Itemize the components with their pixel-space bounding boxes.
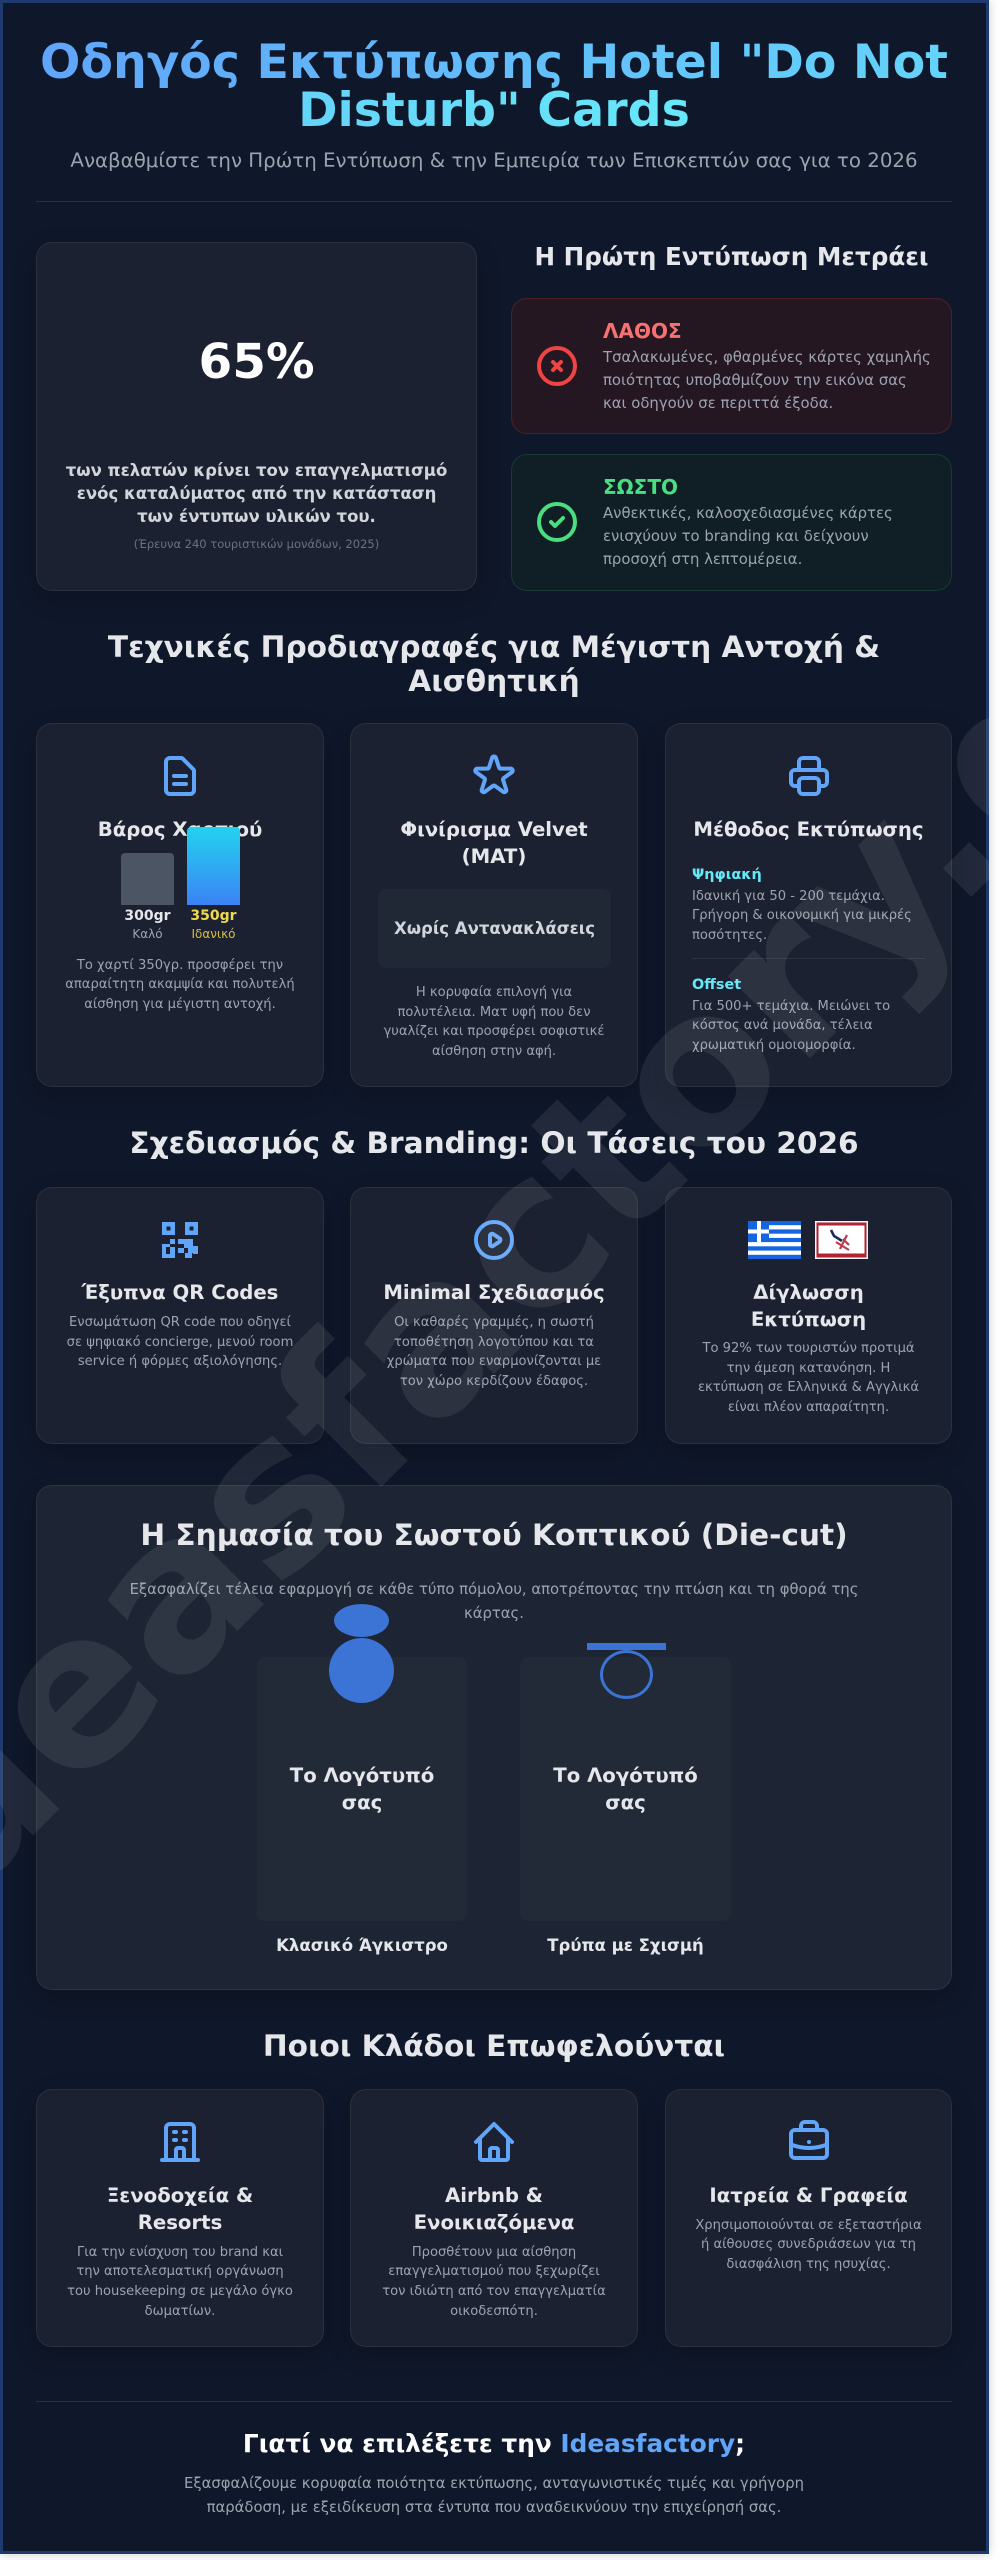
bar label: 300gr: 300gr xyxy=(124,908,171,924)
stat number: 65% xyxy=(198,334,315,390)
card title: Airbnb & xyxy=(445,2184,543,2207)
card title: Μέθοδος Εκτύπωσης xyxy=(693,818,924,841)
card text: Προσθέτουν μια αίσθηση xyxy=(412,2244,576,2260)
heading: first impression: Η Πρώτη Εντύπωση Μετράει xyxy=(534,242,929,271)
panel text: κάρτας. xyxy=(464,1604,524,1622)
bar: 350gr xyxy=(187,827,240,905)
no reflections box xyxy=(378,889,611,968)
card title: Minimal Σχεδιασμός xyxy=(383,1281,605,1304)
heading: sectors: Ποιοι Κλάδοι Επωφελούνται xyxy=(263,2029,725,2063)
title: Οδηγός Εκτύπωσης Hotel "Do Not xyxy=(40,34,948,90)
digital text: ποσότητες. xyxy=(692,928,767,943)
panel: die-cut importance xyxy=(36,1485,952,1990)
card text: Για την ενίσχυση του brand και xyxy=(77,2244,283,2260)
card text xyxy=(695,2218,922,2272)
card text: Χρησιμοποιούνται σε εξεταστήρια xyxy=(695,2218,922,2232)
footer text: Εξασφαλίζουμε κορυφαία ποιότητα εκτύπωσης, ανταγωνιστικές τιμές και γρήγορη xyxy=(184,2475,804,2492)
card text: την άμεση κατανόηση. Η xyxy=(727,1361,890,1376)
icon: flags xyxy=(748,1221,868,1259)
hook label: Κλασικό Άγκιστρο xyxy=(276,1936,448,1955)
digital text xyxy=(692,888,912,943)
logo placeholder text xyxy=(290,1764,434,1814)
panel: bilingual printing xyxy=(665,1187,952,1444)
panel: paper weight xyxy=(36,723,324,1087)
card text: τον χώρο κερδίζουν έδαφος. xyxy=(400,1374,588,1389)
panel: printing method xyxy=(665,723,952,1087)
right text xyxy=(603,504,893,568)
footer text xyxy=(184,2475,804,2516)
card text: σε ψηφιακό concierge, μενού room xyxy=(67,1335,293,1350)
card title: Resorts xyxy=(138,2211,222,2234)
offset text: Για 500+ τεμάχια. Μειώνει το xyxy=(692,998,890,1014)
card title: Ξενοδοχεία & xyxy=(107,2184,253,2207)
bar: 300gr xyxy=(121,853,174,905)
hook shape: circle xyxy=(329,1638,394,1703)
logo placeholder text: Το Λογότυπό xyxy=(553,1764,698,1787)
panel: QR codes xyxy=(36,1187,324,1444)
card title xyxy=(414,2184,574,2234)
card text xyxy=(384,985,604,1059)
card text: Η κορυφαία επιλογή για xyxy=(416,985,572,1000)
icon: star xyxy=(473,754,515,794)
card text: χρώματα που εναρμονίζονται με xyxy=(387,1354,601,1369)
icon: home xyxy=(474,2122,514,2162)
stat description: των έντυπων υλικών του. xyxy=(137,507,376,526)
digital label: Ψηφιακή xyxy=(692,867,762,883)
slit shape xyxy=(587,1643,666,1650)
card text xyxy=(387,1315,601,1389)
stat description xyxy=(66,461,447,526)
logo placeholder text: σας xyxy=(342,1791,382,1814)
panel: hotels xyxy=(36,2089,324,2347)
card text: Το χαρτί 350γρ. προσφέρει την xyxy=(77,958,283,972)
heading: technical specifications: Τεχνικές Προδιαγραφές για Μέγιστη Αντοχή & xyxy=(108,630,880,664)
hole shape xyxy=(600,1650,653,1699)
panel: 65% statistic xyxy=(36,242,477,591)
stat description: των πελατών κρίνει τον επαγγελματισμό xyxy=(66,461,447,480)
wrong label: ΛΑΘΟΣ xyxy=(603,319,682,343)
card text: Το 92% των τουριστών προτιμά xyxy=(702,1341,915,1356)
card title: Βάρος Χαρτιού xyxy=(98,818,262,841)
panel: airbnb xyxy=(350,2089,638,2347)
card title xyxy=(107,2184,253,2234)
card text xyxy=(67,1315,293,1369)
footer divider xyxy=(36,2401,952,2402)
card text xyxy=(382,2244,606,2319)
panel heading: Η Σημασία του Σωστού Κοπτικού (Die-cut) xyxy=(140,1518,848,1552)
icon: briefcase xyxy=(788,2120,830,2160)
icon: QR code xyxy=(162,1222,198,1258)
card text: απαραίτητη ακαμψία και πολυτελή xyxy=(65,977,295,992)
right text: Ανθεκτικές, καλοσχεδιασμένες κάρτες xyxy=(603,504,893,522)
card text: Οι καθαρές γραμμές, η σωστή xyxy=(394,1315,594,1330)
icon: x circle xyxy=(537,346,577,386)
card title: Φινίρισμα Velvet xyxy=(400,818,588,841)
wrong text: Τσαλακωμένες, φθαρμένες κάρτες χαμηλής xyxy=(603,348,931,366)
stat description: ενός καταλύματος από την κατάσταση xyxy=(77,484,436,503)
panel: velvet finish xyxy=(350,723,638,1087)
panel: clinics and offices xyxy=(665,2089,952,2347)
card mock: classic hook xyxy=(257,1657,467,1921)
card text: είναι πλέον απαραίτητη. xyxy=(728,1400,889,1415)
card text: service ή φόρμες αξιολόγησης. xyxy=(78,1354,282,1369)
bar sublabel: ideal: Ιδανικό xyxy=(192,927,235,941)
panel text: Εξασφαλίζει τέλεια εφαρμογή σε κάθε τύπο πόμολου, αποτρέποντας την πτώση και τη φθορά της xyxy=(130,1581,858,1598)
slit label: Τρύπα με Σχισμή xyxy=(547,1936,704,1955)
wrong text xyxy=(602,348,931,412)
header divider xyxy=(36,201,952,202)
card text: αίσθηση στην αφή. xyxy=(432,1044,556,1059)
digital text: Γρήγορη & οικονομική για μικρές xyxy=(692,908,912,923)
card text: εκτύπωση σε Ελληνικά & Αγγλικά xyxy=(698,1380,919,1395)
card text xyxy=(65,958,295,1012)
card text: Ενσωμάτωση QR code που οδηγεί xyxy=(69,1315,291,1330)
offset text: χρωματική ομοιομορφία. xyxy=(692,1038,856,1053)
card title: Ενοικιαζόμενα xyxy=(414,2211,574,2234)
right label: ΣΩΣΤΟ xyxy=(603,475,678,499)
card text: την αποτελεσματική οργάνωση xyxy=(76,2264,284,2279)
card text: επαγγελματισμού που ξεχωρίζει xyxy=(388,2264,600,2279)
card text: διασφάλιση της ησυχίας. xyxy=(726,2257,891,2272)
icon: building xyxy=(160,2122,200,2162)
card title: Έξυπνα QR Codes xyxy=(82,1281,278,1304)
card title xyxy=(751,1281,866,1331)
icon: printer xyxy=(789,756,829,796)
card text: γυαλίζει και προσφέρει σοφιστικέ xyxy=(384,1024,604,1039)
card title xyxy=(400,818,588,868)
panel text xyxy=(130,1581,858,1622)
card mock: hole with slit xyxy=(520,1657,731,1921)
offset label: Offset xyxy=(692,977,741,993)
card text xyxy=(67,2244,293,2319)
card text: ή αίθουσες συνεδριάσεων για τη xyxy=(701,2237,916,2252)
stat source: (Έρευνα 240 τουριστικών μονάδων, 2025) xyxy=(134,537,379,551)
subtitle: Αναβαθμίστε την Πρώτη Εντύπωση & την Εμπειρία των Επισκεπτών σας για το 2026 xyxy=(70,149,918,172)
card title: Εκτύπωση xyxy=(751,1308,866,1331)
right text: ενισχύουν το branding και δείχνουν xyxy=(603,527,869,545)
title: Disturb" Cards xyxy=(298,83,690,138)
card text: του housekeeping σε μεγάλο όγκο xyxy=(67,2284,293,2299)
heading: technical specifications xyxy=(108,630,880,698)
card text: οικοδεσπότη. xyxy=(450,2304,538,2319)
logo placeholder text: σας xyxy=(605,1791,646,1814)
wrong text: ποιότητας υποβαθμίζουν την εικόνα σας xyxy=(603,371,907,389)
card text: τον ιδιώτη από τον επαγγελματία xyxy=(382,2284,606,2299)
wrong text: και οδηγούν σε περιττά έξοδα. xyxy=(603,394,833,412)
card title: Ιατρεία & Γραφεία xyxy=(709,2184,908,2207)
panel: right xyxy=(511,454,952,591)
offset text: κόστος ανά μονάδα, τέλεια xyxy=(692,1018,873,1033)
box text: Χωρίς Αντανακλάσεις xyxy=(394,919,595,938)
icon: document xyxy=(164,756,196,796)
footer text: παράδοση, με εξειδίκευση στα έντυπα που αναδεικνύουν την επιχείρησή σας. xyxy=(207,2498,781,2516)
offset text xyxy=(692,998,890,1053)
card text xyxy=(698,1341,919,1415)
right text: προσοχή στη λεπτομέρεια. xyxy=(603,550,802,568)
card text: αίσθηση για μέγιστη αντοχή. xyxy=(84,997,276,1012)
card text: τοποθέτηση λογοτύπου και τα xyxy=(394,1335,594,1350)
digital text: Ιδανική για 50 - 200 τεμάχια. xyxy=(692,888,885,904)
footer heading: Γιατί να επιλέξετε την Ideasfactory; xyxy=(243,2429,745,2458)
card title: (MAT) xyxy=(462,845,526,868)
panel: wrong xyxy=(511,298,952,434)
title xyxy=(40,34,948,138)
icon: check circle xyxy=(537,502,577,542)
heading: technical specifications: Αισθητική xyxy=(408,664,580,698)
icon: play circle xyxy=(474,1220,514,1260)
logo placeholder text: Το Λογότυπό xyxy=(290,1764,434,1787)
logo placeholder text xyxy=(553,1764,698,1814)
bar label: 350gr: 350gr xyxy=(190,908,237,924)
hook shape: top ellipse xyxy=(334,1604,389,1637)
card text: δωματίων. xyxy=(145,2304,215,2319)
panel: minimal design xyxy=(350,1187,638,1444)
card title: Δίγλωσση xyxy=(753,1281,864,1304)
bar sublabel: good: Καλό xyxy=(132,927,163,941)
card text: πολυτέλεια. Ματ υφή που δεν xyxy=(397,1005,591,1020)
heading: design and branding: Σχεδιασμός & Branding: Οι Τάσεις του 2026 xyxy=(129,1126,859,1160)
